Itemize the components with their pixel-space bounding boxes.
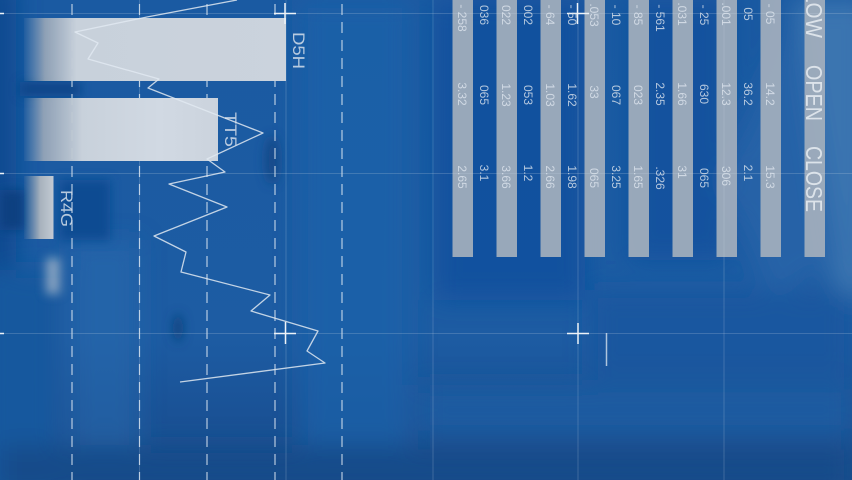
table values: - 25 (697, 5, 711, 26)
table values: 31 (675, 165, 689, 179)
table values: - 50 (565, 5, 579, 26)
table values: 3.25 (609, 165, 623, 189)
table values: - 561 (653, 4, 667, 32)
table values: 3.66 (499, 165, 513, 189)
table values: 1.66 (675, 82, 689, 106)
table values: 1.65 (631, 165, 645, 189)
table values: 1.2 (521, 165, 535, 182)
table values: 15.3 (763, 165, 777, 189)
table values: 023 (631, 85, 645, 105)
table values: 05 (741, 7, 755, 21)
table values: - 85 (631, 5, 645, 26)
bar: TT5 (24, 98, 218, 161)
table values: 1.62 (565, 83, 579, 107)
table values: .001 (719, 2, 733, 26)
table headers (801, 0, 827, 212)
table values: 002 (521, 5, 535, 25)
table values: 306 (719, 166, 733, 186)
table values: 065 (477, 85, 491, 105)
table values: 2.65 (455, 165, 469, 189)
table values: 33 (587, 85, 601, 99)
table values: - 258 (455, 4, 469, 32)
label: D5H: D5H (289, 32, 308, 69)
table values: 053 (521, 85, 535, 105)
table values: 3.32 (455, 82, 469, 106)
table values: 1.03 (543, 83, 557, 107)
table values: 022 (499, 5, 513, 25)
table values: .326 (653, 166, 667, 190)
table values: .031 (675, 2, 689, 26)
table values: 1.98 (565, 165, 579, 189)
table values: 2.1 (741, 165, 755, 182)
label: TT5: TT5 (221, 112, 240, 147)
table values: 3.1 (477, 165, 491, 182)
table values: 2.35 (653, 82, 667, 106)
crosshair markers (0, 3, 606, 366)
table values: 067 (609, 85, 623, 105)
table values: 12.3 (719, 82, 733, 106)
label: R4G: R4G (57, 190, 76, 227)
line chart (75, 0, 325, 382)
table values: 14.2 (763, 82, 777, 106)
table values: - 05 (763, 4, 777, 25)
table values: .053 (587, 3, 601, 27)
table values: - 10 (609, 5, 623, 26)
table values: 065 (697, 168, 711, 188)
table values: 1.23 (499, 83, 513, 107)
table values: 036 (477, 5, 491, 25)
header: CLOSE: CLOSE (801, 146, 827, 212)
table values: 36.2 (741, 82, 755, 106)
bar chart (24, 18, 308, 239)
data table columns (452, 0, 825, 257)
header: OPEN: OPEN (801, 65, 827, 121)
table values: 2.66 (543, 165, 557, 189)
bar: R4G (24, 176, 54, 239)
table values: 065 (587, 168, 601, 188)
table values: - 64 (543, 5, 557, 26)
table values (455, 2, 777, 190)
bar: D5H (24, 18, 286, 81)
table values: 630 (697, 84, 711, 104)
